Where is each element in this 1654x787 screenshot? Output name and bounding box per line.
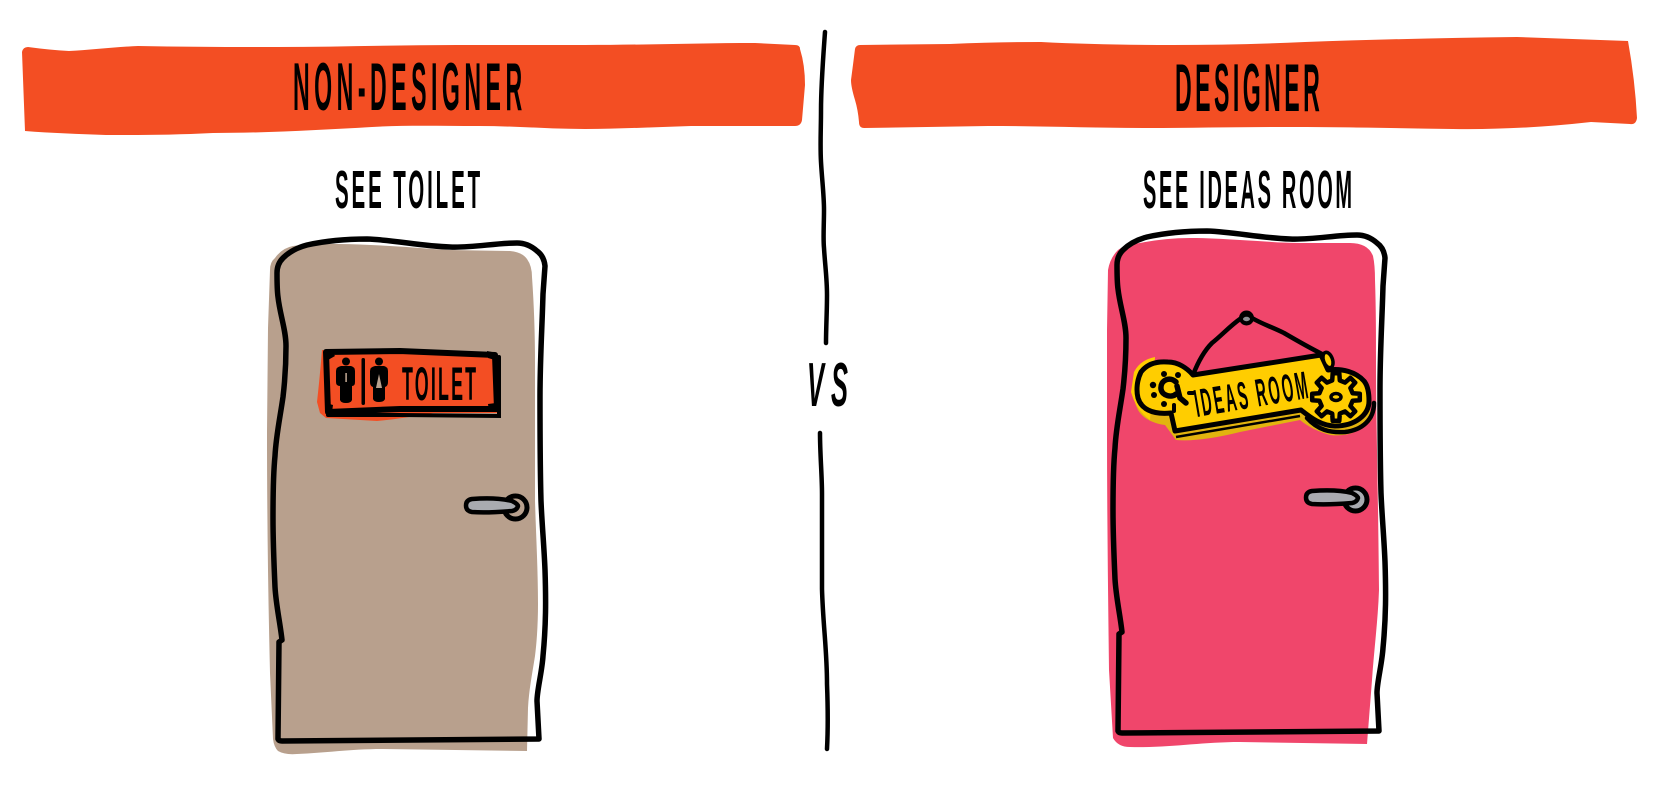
sign: ideas room — [1131, 310, 1374, 440]
sign shadow — [1132, 360, 1372, 440]
banner: designer — [851, 37, 1637, 129]
icon: man — [336, 358, 355, 403]
hanging string — [1193, 318, 1322, 375]
panel: designer — [851, 37, 1637, 747]
sign label: ideas room: IDEAS ROOM — [1191, 364, 1311, 426]
divider in sign — [362, 358, 365, 405]
panel: non-designer — [22, 43, 805, 754]
icon: door handle — [466, 496, 527, 519]
icon: woman — [370, 358, 388, 402]
subheading: see toilet: SEE TOILET — [335, 159, 480, 220]
infographic canvas: V S — [807, 351, 848, 420]
sign label: toilet: TOILET — [402, 358, 476, 411]
knot — [1321, 351, 1335, 369]
divider: top — [821, 32, 827, 343]
divider: bottom — [820, 433, 828, 749]
sign bottom edge — [1176, 416, 1300, 437]
door: pink — [1107, 231, 1386, 747]
banner: non-designer — [22, 43, 805, 135]
door: brown — [267, 239, 546, 754]
banner: non-designer: NON-DESIGNER — [293, 48, 522, 125]
subheading: see ideas room: SEE IDEAS ROOM — [1143, 159, 1352, 220]
icon: door handle — [1306, 488, 1367, 511]
sign: toilet — [317, 350, 499, 421]
pin — [1239, 310, 1254, 326]
banner: designer: DESIGNER — [1175, 49, 1320, 126]
sign body — [1137, 355, 1369, 431]
icon: light bulb — [1150, 371, 1195, 413]
icon: gear — [1312, 373, 1360, 421]
gear shadow edge — [1307, 403, 1374, 432]
